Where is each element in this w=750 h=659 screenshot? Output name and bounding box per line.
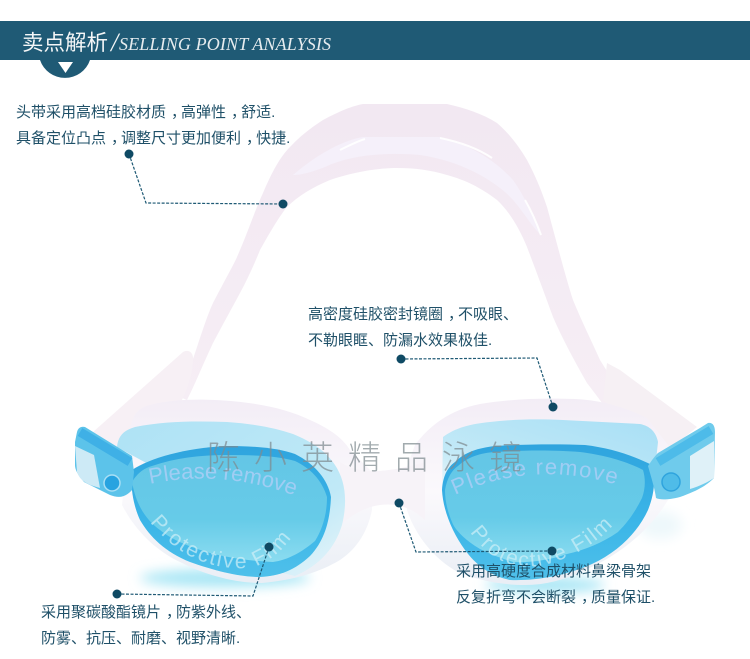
callout: lens [41,542,274,647]
lens film text [149,462,617,568]
soft shadow under lenses [140,511,682,593]
callout: gasket: 不勒眼眶、防漏水效果极佳. [308,332,492,349]
heading: / [109,28,121,57]
right buckle [648,423,715,499]
callout: head strap [16,104,290,208]
goggles illustration [75,104,715,600]
callout: lens: 采用聚碳酸酯镜片 ，防紫外线、 [41,603,251,621]
right pale blue seal [442,419,658,490]
callout: gasket: 高密度硅胶密封镜圈 ，不吸眼、 [308,305,518,323]
right lens [445,450,645,562]
header bar [0,21,750,78]
watermark: 陈小英精品泳镜 [207,439,522,476]
right gasket [405,399,672,585]
left pale blue seal [117,422,345,576]
lens film text: Protective Film [471,520,612,567]
callout: lens: 防雾、抗压、耐磨、视野清晰. [41,630,240,647]
left blue frame [131,446,331,577]
right blue frame [442,444,654,580]
header tab with arrow [40,60,90,78]
lens film text: Please remove [149,465,296,494]
callout: nose bridge: 采用高硬度合成材料鼻梁骨架 [456,563,651,580]
left gasket [122,400,372,583]
callout: nose bridge: 反复折弯不会断裂 ，质量保证. [456,588,655,606]
callout: head strap: 头带采用高档硅胶材质 ，高弹性 ，舒适. [16,104,275,121]
lens film text: Please remove [450,462,617,494]
strap buckle ends [93,351,697,462]
callout: nose bridge [394,498,655,606]
left buckle [75,427,134,497]
heading: SELLING POINT ANALYSIS [119,34,331,54]
heading [22,28,331,57]
lens film text: Protective Film [151,514,290,568]
callout: head strap: 具备定位凸点 ，调整尺寸更加便利 ，快捷. [16,130,290,147]
nose bridge [340,462,425,525]
left lens [132,455,327,562]
callout: gasket [308,305,558,412]
heading: 卖点解析 [22,31,108,55]
head strap [180,104,625,410]
